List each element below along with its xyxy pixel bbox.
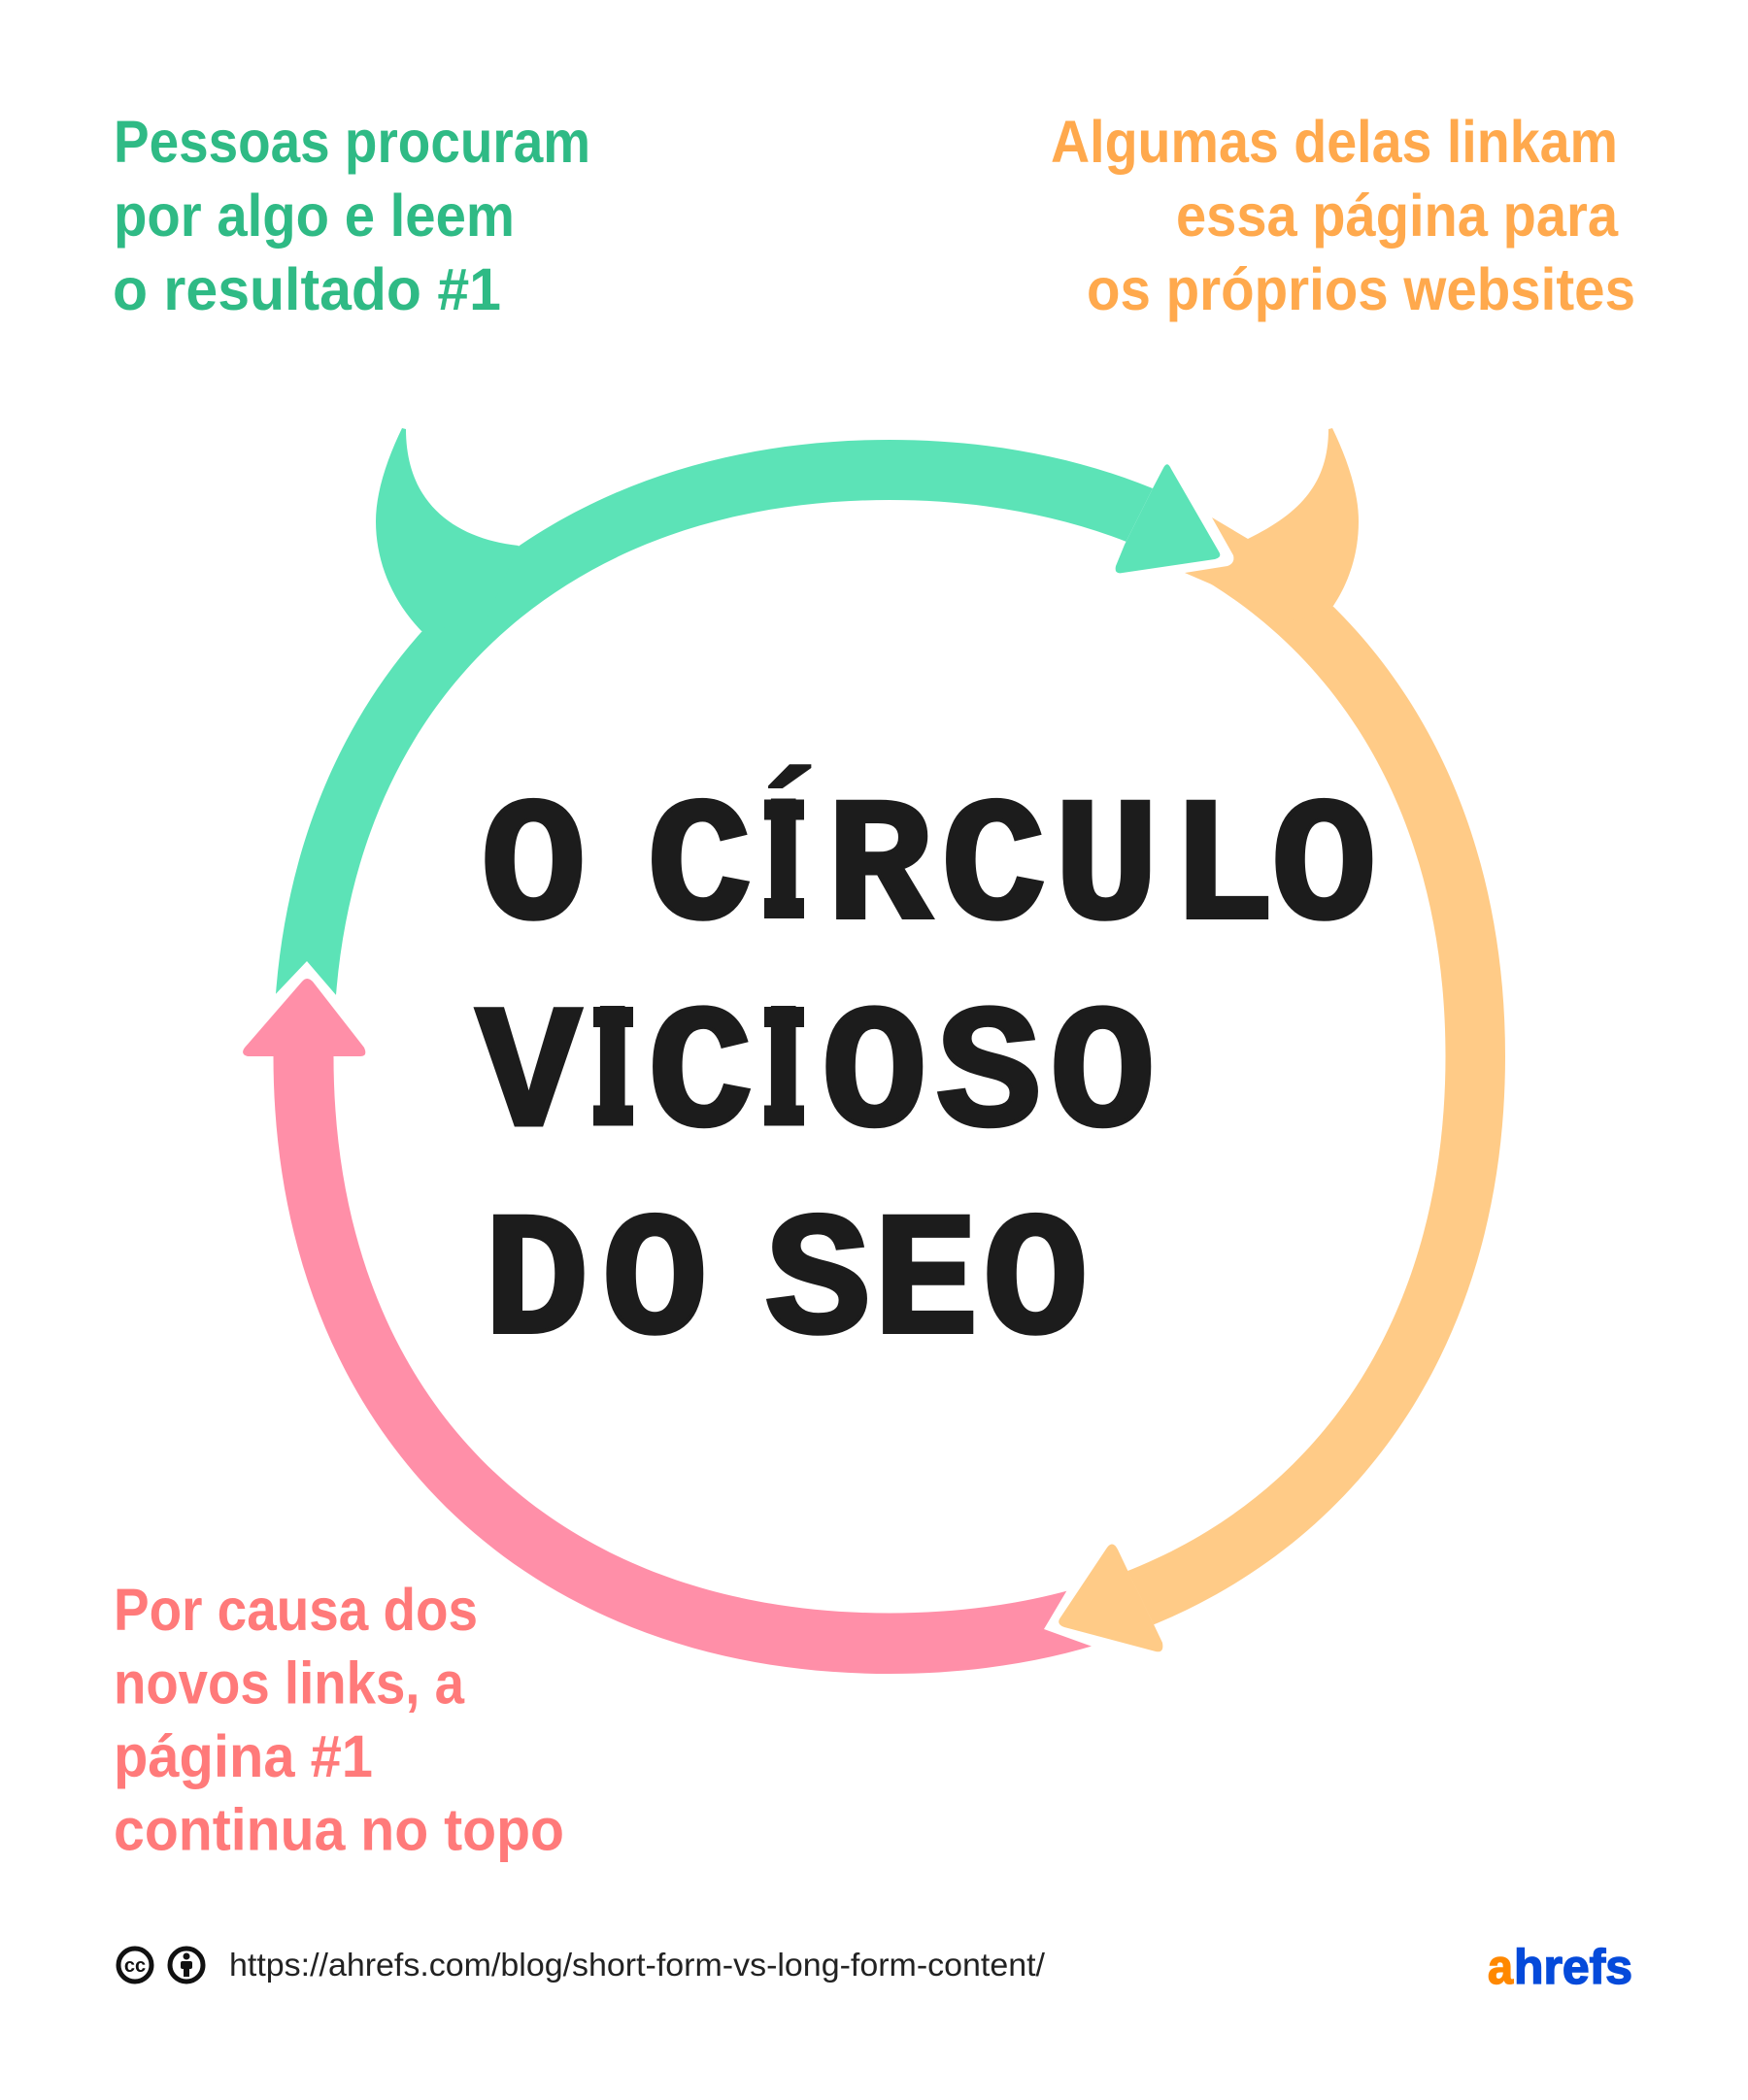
text: step three, coral: Por causa dos <box>114 1577 478 1643</box>
text: step three, coral: novos links, a <box>114 1650 465 1717</box>
text: step one, green <box>113 109 590 322</box>
icon: attribution <box>170 1949 203 1982</box>
text: step one, green: Pessoas procuram <box>114 109 590 175</box>
text: step two, orange: os próprios websites <box>1087 256 1635 322</box>
logo: ahrefs: hrefs <box>1514 1940 1632 1994</box>
source url: https://ahrefs.com/blog/short-form-vs-long-form-content/ <box>229 1947 1046 1983</box>
text: step three, coral: página #1 <box>114 1723 373 1789</box>
title: DO SEO <box>484 1186 1089 1385</box>
arrow: pink, page stays on top <box>243 440 1505 1674</box>
arrow: orange, link to the page <box>1059 428 1505 1652</box>
text: step one, green: o resultado #1 <box>113 256 501 322</box>
logo: ahrefs: a <box>1488 1940 1514 1994</box>
text: step one, green: por algo e leem <box>114 183 515 249</box>
text: step three, coral: continua no topo <box>114 1796 564 1862</box>
text: step two, orange: Algumas delas linkam <box>1051 109 1618 175</box>
icon: creative commons <box>118 1949 151 1982</box>
title: O CÍRCULO <box>481 761 1377 971</box>
text: step two, orange: essa página para <box>1176 183 1619 249</box>
arrow: green, search and read <box>276 428 1220 995</box>
text: step two, orange <box>1051 109 1635 322</box>
icon: creative commons: cc <box>124 1955 146 1977</box>
title: VICIOSO <box>476 969 1156 1179</box>
text: step three, coral <box>114 1577 564 1862</box>
title <box>476 761 1377 1385</box>
